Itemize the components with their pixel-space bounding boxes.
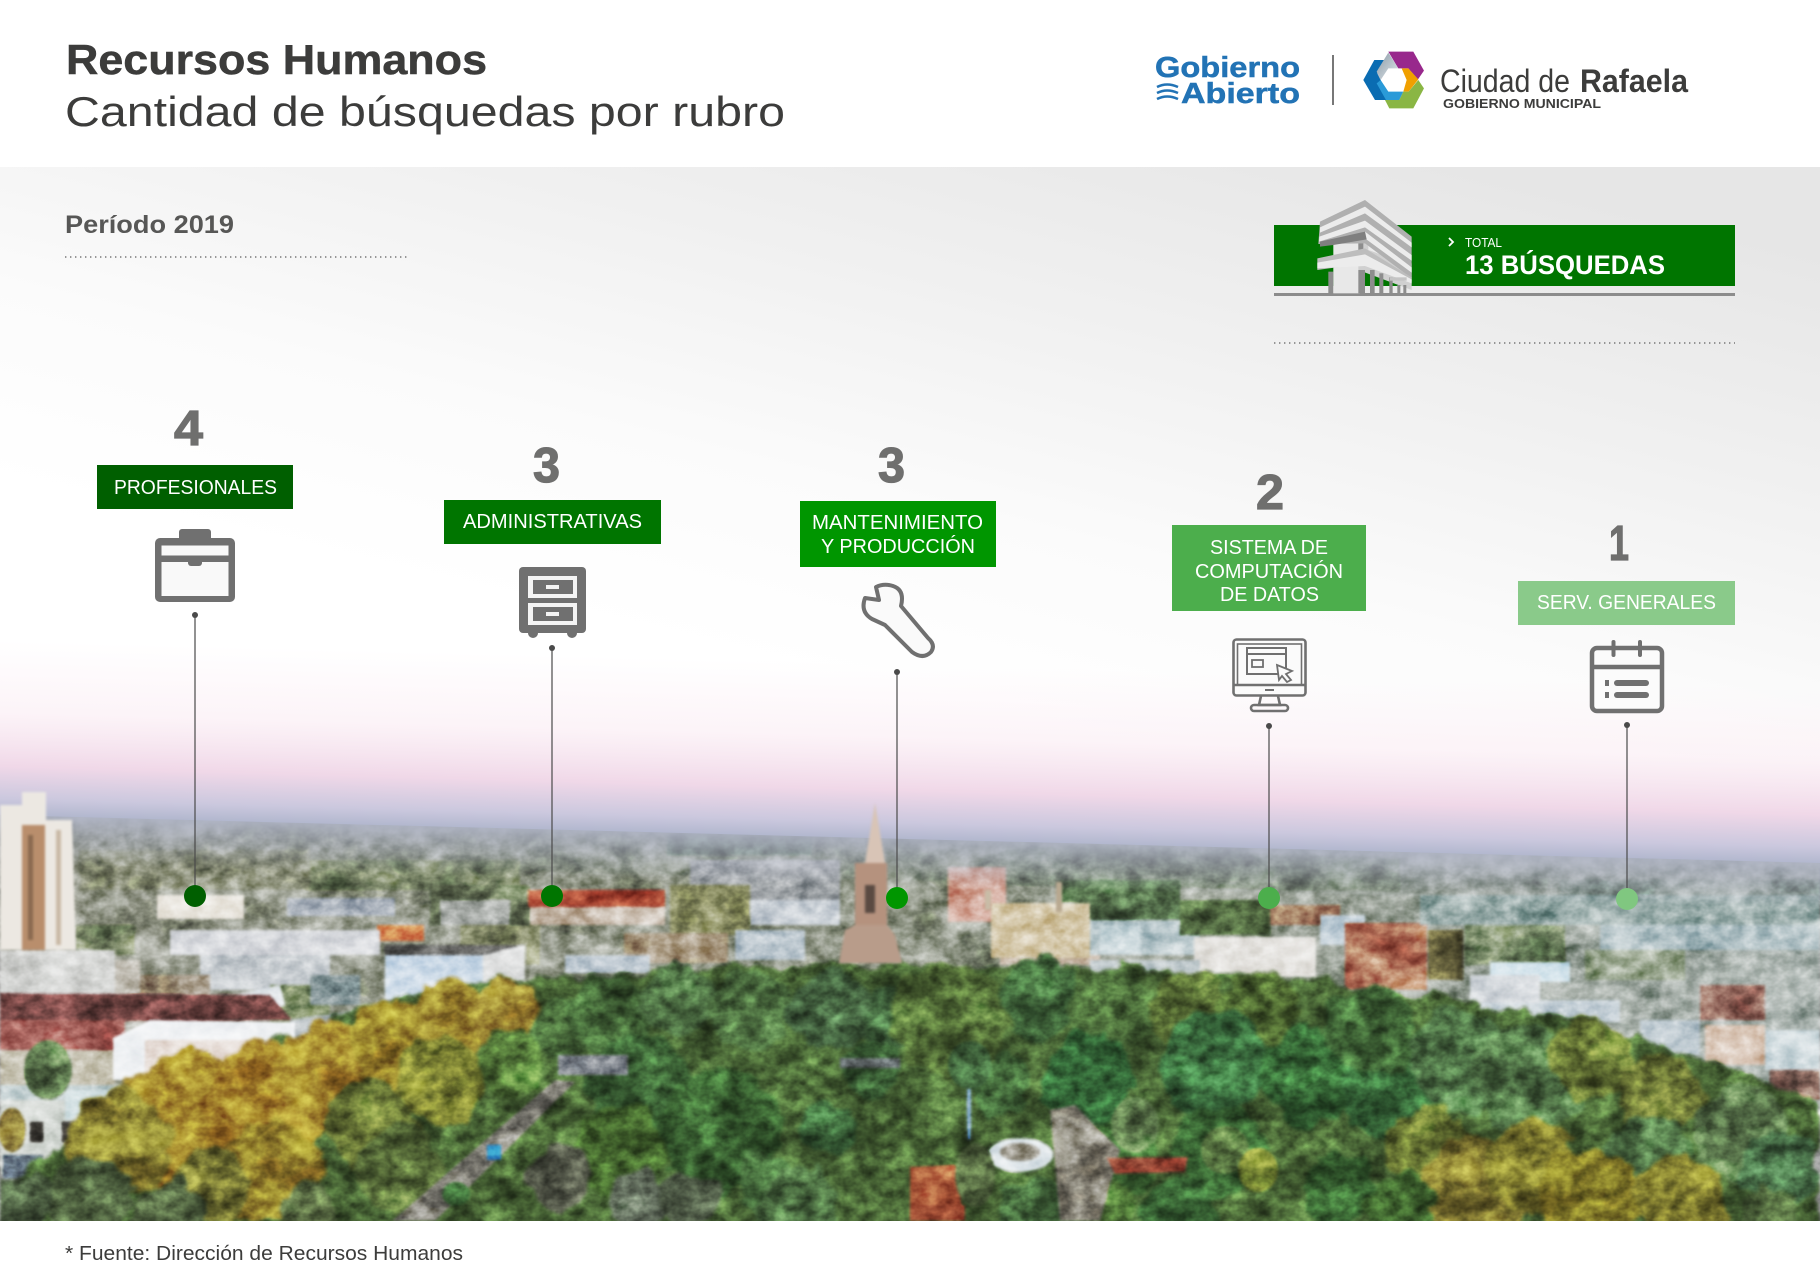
column: Profesionales [97, 402, 293, 907]
right greens [892, 962, 1008, 1078]
column: Mantenimiento y Producción [800, 439, 996, 909]
column: Administrativas [444, 439, 661, 907]
green band [1274, 225, 1735, 286]
label box [800, 501, 996, 567]
count: 2 [1256, 466, 1284, 520]
total label: TOTAL [1465, 235, 1502, 250]
subtitle: Cantidad de búsquedas por rubro [65, 88, 785, 135]
label box [1518, 581, 1735, 625]
pin line [1616, 722, 1638, 910]
label box [444, 500, 661, 544]
label box: ADMINISTRATIVAS [463, 510, 642, 533]
column: Servicios Generales [1518, 517, 1735, 910]
tall tower [0, 792, 76, 950]
logo: Ciudad de Rafaela: Ciudad de [1440, 63, 1570, 99]
icon: computer monitor [1234, 640, 1306, 711]
foliage shading texture [0, 800, 1820, 1230]
pin line [1258, 723, 1280, 909]
label box: PROFESIONALES [114, 476, 277, 499]
source footnote: * Fuente: Dirección de Recursos Humanos [65, 1243, 463, 1265]
total badge [1274, 200, 1735, 296]
label box: DE DATOS [1220, 583, 1319, 606]
count: 3 [533, 439, 560, 493]
promenade path [392, 1080, 575, 1221]
label box: SISTEMA DE [1210, 536, 1328, 559]
church [865, 803, 885, 863]
rooftop and leaf texture [0, 800, 1820, 1230]
label box: SERV. GENERALES [1537, 591, 1716, 614]
pin line [886, 669, 908, 909]
logo: Gobierno Abierto: Abierto [1181, 78, 1300, 110]
ground line [1274, 293, 1735, 296]
left buildings [0, 950, 115, 998]
yellow left masses [121, 1042, 224, 1190]
right yellow masses [1384, 1102, 1465, 1180]
label box: Y PRODUCCIÓN [821, 535, 975, 558]
centre greens [566, 972, 628, 1046]
icon: filing cabinet [519, 567, 586, 638]
label box: COMPUTACIÓN [1195, 560, 1343, 583]
dotted rule under total [1274, 342, 1735, 344]
tan towers [985, 890, 991, 910]
logo: Gobierno Abierto: Gobierno [1155, 52, 1300, 84]
horizon haze [0, 815, 1820, 898]
label box: MANTENIMIENTO [812, 511, 983, 534]
logo: Ciudad de Rafaela: GOBIERNO MUNICIPAL [1443, 97, 1601, 111]
tree canopy base [0, 964, 1820, 1240]
plaza paths and fountain [1050, 1105, 1120, 1221]
pin line [184, 612, 206, 907]
logo: Gobierno Abierto [1155, 52, 1300, 110]
period label: Período 2019 [65, 211, 234, 239]
label box [1172, 525, 1366, 611]
right low buildings [948, 867, 1006, 922]
icon: briefcase [155, 529, 235, 602]
logo divider [1332, 55, 1334, 105]
label box [97, 465, 293, 509]
icon: building [1317, 200, 1412, 293]
title: Recursos Humanos [66, 36, 487, 83]
count: 3 [878, 439, 905, 493]
count: 1 [1609, 517, 1629, 571]
icon: wrench [864, 585, 933, 656]
logo: Ciudad de Rafaela: Rafaela [1580, 63, 1688, 99]
pin line [541, 645, 563, 907]
logo: hexagon emblem [1363, 52, 1424, 108]
count: 4 [174, 402, 203, 456]
dotted rule under period [65, 256, 407, 258]
column: Sistema de Computación de Datos [1172, 466, 1366, 909]
icon: chevron [1449, 238, 1453, 246]
logo: Ciudad de Rafaela [1440, 63, 1688, 111]
total value: 13 BÚSQUEDAS [1465, 249, 1665, 280]
header background [0, 0, 1820, 167]
icon: calendar [1592, 642, 1662, 711]
